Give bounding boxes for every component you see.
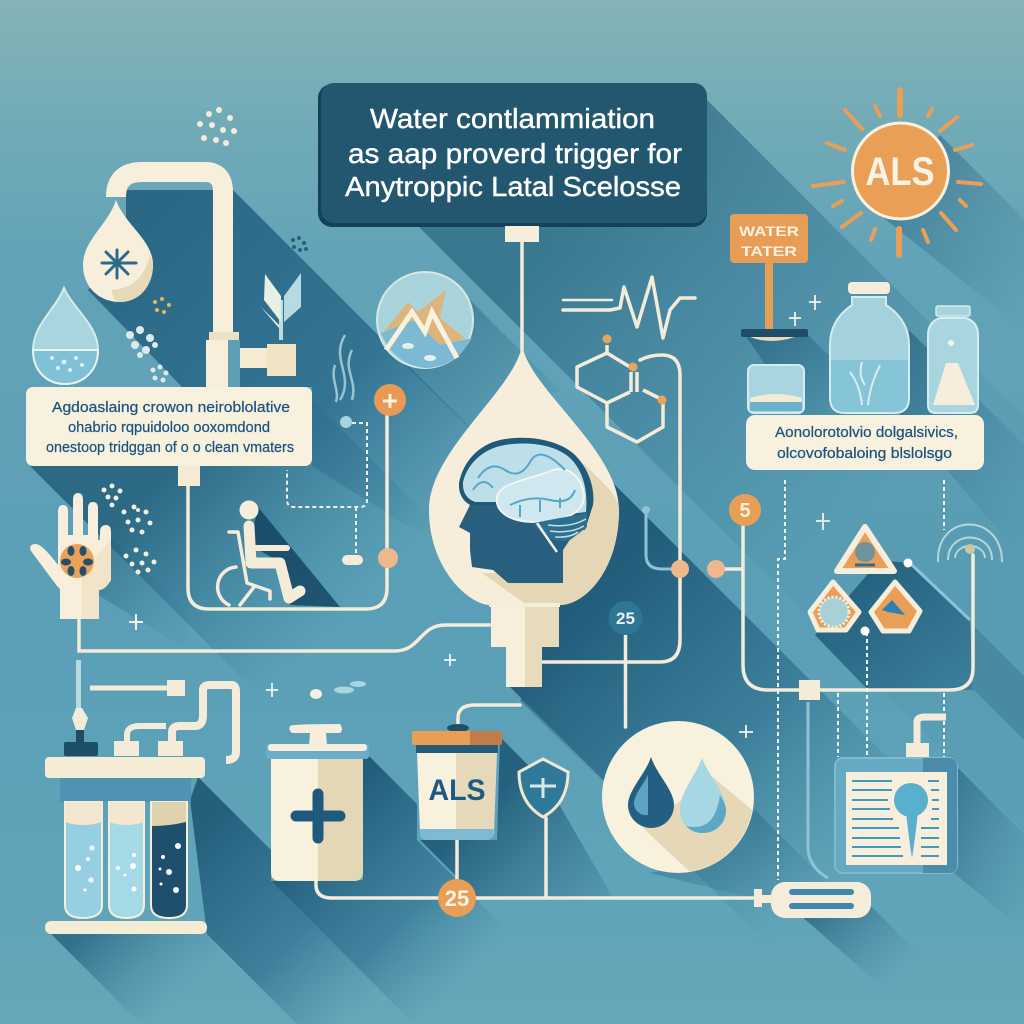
- icon: leaf plant: [260, 273, 301, 340]
- tube 2: [109, 802, 144, 918]
- title text: Water contlammiation: [370, 103, 655, 134]
- marker: 25 orange: 25: [445, 886, 469, 911]
- icon: vapour: [334, 335, 353, 402]
- sign: [730, 214, 808, 341]
- sign: WATER: [739, 223, 799, 239]
- triangle right: [871, 582, 920, 631]
- valves: [114, 741, 139, 756]
- filter pipes: [90, 680, 236, 760]
- sun ALS: [813, 90, 981, 255]
- tube 3: [151, 802, 187, 918]
- title text: as aap proverd trigger for: [348, 138, 682, 169]
- sparkles: [266, 295, 830, 738]
- circle with drops: [602, 721, 754, 873]
- short jar: [748, 365, 804, 413]
- icon: water drop with particles: [33, 288, 98, 384]
- light drop: [680, 758, 726, 833]
- pale blue connectors: [646, 510, 970, 878]
- plus canister: [266, 724, 369, 881]
- sun ALS: ALS: [866, 150, 934, 194]
- icon: contaminated drop: [83, 200, 153, 302]
- filter knob: [64, 660, 98, 756]
- small ovals: [310, 681, 366, 699]
- left caption: onestoop tridggan of o o clean vmaters: [46, 439, 294, 456]
- title text: [345, 103, 682, 202]
- large jar: [830, 282, 909, 413]
- particle clusters: [102, 107, 308, 574]
- right caption: olcovofobaloing blslolsgo: [777, 445, 952, 462]
- sparkle: hand: [129, 614, 143, 630]
- triangle left: [810, 582, 859, 630]
- marker: 5: [729, 494, 761, 526]
- icon: globe with mountains: [377, 272, 473, 368]
- document: [835, 717, 957, 873]
- marker: 25 orange: [438, 879, 476, 917]
- right caption: Aonolorotolvio dolgalsivics,: [775, 424, 958, 441]
- tube 1: [65, 802, 102, 918]
- shelf: [45, 757, 205, 778]
- faucet: [116, 172, 296, 486]
- ALS cup: ALS: [428, 774, 486, 807]
- pill cartridge: [754, 882, 871, 918]
- marker: 5: 5: [739, 500, 751, 522]
- icon: wheelchair user: [218, 500, 340, 607]
- brain: [459, 438, 593, 552]
- filter unit: [45, 660, 236, 934]
- left caption: Agdoaslaing crowon neiroblolative: [52, 399, 290, 416]
- icon: hand: [30, 493, 111, 619]
- marker: 25 blue: 25: [616, 609, 635, 628]
- right caption: [746, 415, 984, 470]
- jars: [748, 282, 978, 413]
- marker: 25 blue: [608, 601, 642, 635]
- title text: Anytroppic Latal Scelosse: [345, 171, 681, 202]
- ALS cup: [412, 724, 502, 840]
- head silhouette: [459, 500, 573, 583]
- icon: shield: [519, 759, 568, 817]
- connector lines: [79, 240, 973, 898]
- title panel: [318, 83, 707, 242]
- icon: molecule: [577, 334, 666, 442]
- small junction box: [799, 680, 820, 700]
- marker: plus: [374, 384, 406, 416]
- left caption: [26, 387, 312, 466]
- triangle top: [837, 527, 894, 571]
- dashed connectors: [287, 423, 944, 880]
- icon: signal glow: [938, 524, 1002, 562]
- hazard triangles: [810, 527, 920, 636]
- left caption: ohabrio rqpuidoloo ooxomdond: [68, 419, 270, 436]
- sign: TATER: [741, 243, 797, 259]
- small jar: [928, 306, 978, 413]
- marker: dots: [340, 416, 725, 578]
- brain drop: [429, 345, 619, 687]
- dark drop: [628, 757, 674, 828]
